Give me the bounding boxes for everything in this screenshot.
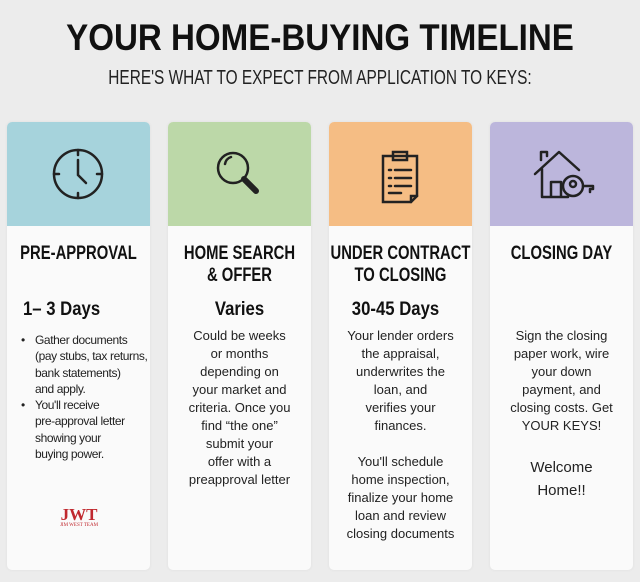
body: finalize your home <box>348 490 453 505</box>
welcome: Welcome <box>530 459 593 476</box>
heading: HOME SEARCH <box>184 243 295 264</box>
body: payment, and <box>522 382 601 397</box>
bullets: bank statements) <box>35 366 121 380</box>
heading: TO CLOSING <box>355 265 446 286</box>
bullets: • <box>21 398 25 412</box>
welcome <box>530 459 593 499</box>
body: your market and <box>193 382 286 397</box>
icon: clipboard <box>329 122 472 226</box>
bullets: You'll receive <box>35 398 99 412</box>
bullets: Gather documents <box>35 333 127 347</box>
panel: pre-approval <box>7 122 150 570</box>
duration: Varies <box>215 299 264 320</box>
panel: closing day <box>490 122 633 570</box>
icon: clock <box>7 122 150 226</box>
body: loan and review <box>355 508 446 523</box>
bullets: (pay stubs, tax returns, <box>35 349 147 363</box>
body: You'll schedule <box>358 454 443 469</box>
heading: CLOSING DAY <box>511 243 612 264</box>
bullets: showing your <box>35 431 101 445</box>
heading <box>331 243 470 286</box>
bullets: buying power. <box>35 447 104 461</box>
bullets: pre-approval letter <box>35 414 125 428</box>
body: submit your <box>206 436 273 451</box>
body: criteria. Once you <box>189 400 290 415</box>
body: paper work, wire <box>514 346 609 361</box>
body <box>347 328 454 541</box>
body: Could be weeks <box>193 328 286 343</box>
heading: UNDER CONTRACT <box>331 243 470 264</box>
body: your down <box>532 364 591 379</box>
duration: 1– 3 Days <box>23 299 100 320</box>
icon: house with key <box>490 122 633 226</box>
body: underwrites the <box>356 364 445 379</box>
heading <box>184 243 295 286</box>
body: closing costs. Get <box>510 400 613 415</box>
body: finances. <box>374 418 427 433</box>
duration: 30-45 Days <box>352 299 439 320</box>
body: YOUR KEYS! <box>522 418 601 433</box>
panel: under contract <box>329 122 472 570</box>
panel: home search <box>168 122 311 570</box>
title: YOUR HOME-BUYING TIMELINE <box>66 17 574 58</box>
bullets <box>21 333 147 461</box>
bullets: and apply. <box>35 382 86 396</box>
logo: JIM WEST TEAM <box>60 523 98 528</box>
body: offer with a <box>208 454 271 469</box>
heading: PRE-APPROVAL <box>20 243 137 264</box>
body: preapproval letter <box>189 472 290 487</box>
body <box>189 328 290 487</box>
subtitle: HERE'S WHAT TO EXPECT FROM APPLICATION TO KEYS: <box>108 67 532 89</box>
body: or months <box>211 346 268 361</box>
heading: & OFFER <box>207 265 272 286</box>
icon: magnifier <box>168 122 311 226</box>
body: verifies your <box>365 400 436 415</box>
body <box>510 328 613 433</box>
body: depending on <box>200 364 279 379</box>
body: loan, and <box>374 382 427 397</box>
body: Your lender orders <box>347 328 454 343</box>
bullets: • <box>21 333 25 347</box>
body: home inspection, <box>351 472 450 487</box>
welcome: Home!! <box>537 482 586 499</box>
logo: JWT <box>61 505 97 524</box>
body: the appraisal, <box>361 346 440 361</box>
body: find “the one” <box>201 418 278 433</box>
body: closing documents <box>347 526 454 541</box>
body: Sign the closing <box>516 328 607 343</box>
